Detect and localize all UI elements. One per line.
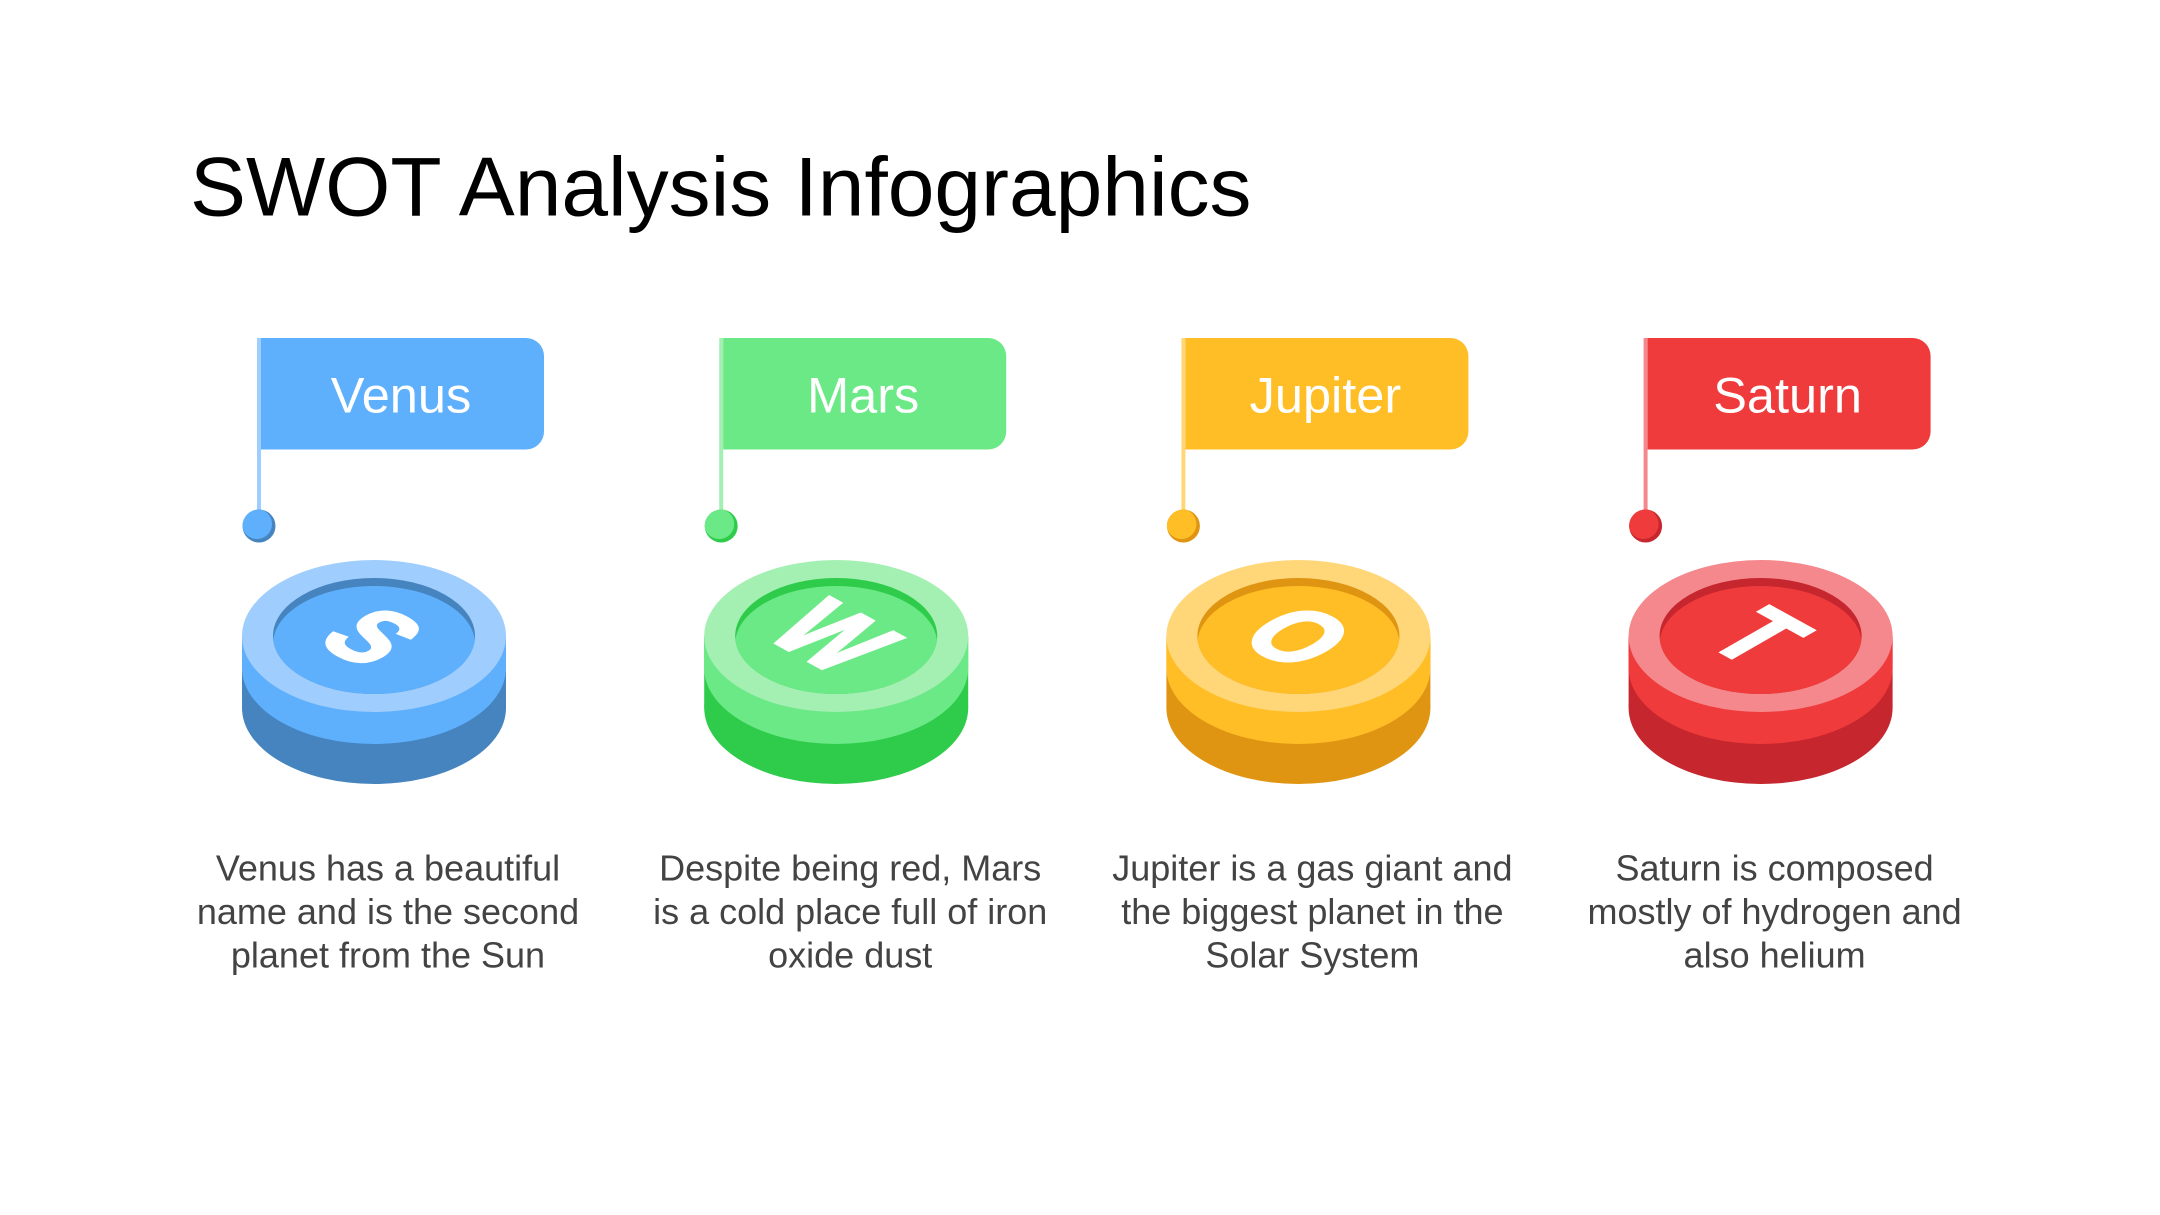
panel: Venus xyxy=(197,338,579,976)
text block: Venus: planet from the Sun xyxy=(231,934,545,976)
text block: Saturn: mostly of hydrogen and xyxy=(1587,891,1962,932)
flag: Saturn: Saturn xyxy=(1713,366,1862,424)
icon: disc O xyxy=(1166,560,1430,784)
flag: Venus: Venus xyxy=(331,366,471,424)
flag: Mars xyxy=(719,338,1006,510)
flag: Venus xyxy=(257,338,544,510)
flag: Mars: Mars xyxy=(807,366,919,424)
icon: pin dot xyxy=(1166,509,1200,542)
icon: pin dot xyxy=(704,509,738,542)
text block: Jupiter: the biggest planet in the xyxy=(1121,891,1504,932)
panel: Mars xyxy=(653,338,1047,976)
title: SWOT Analysis Infographics xyxy=(190,140,1252,234)
icon: disc W: W xyxy=(740,584,926,689)
text block: Saturn: also helium xyxy=(1684,934,1866,976)
icon: disc S: S xyxy=(294,592,451,681)
panel: Saturn xyxy=(1587,338,1962,976)
flag: Jupiter: Jupiter xyxy=(1250,366,1401,424)
flag: Jupiter xyxy=(1181,338,1468,510)
icon: disc T xyxy=(1629,560,1893,784)
text block: Jupiter: Jupiter is a gas giant and xyxy=(1112,848,1513,888)
text block: Saturn: Saturn is composed xyxy=(1616,848,1934,888)
text block: Mars: oxide dust xyxy=(768,934,932,976)
text block: Saturn xyxy=(1587,848,1962,976)
text block: Mars: Despite being red, Mars xyxy=(659,848,1041,888)
icon: disc S xyxy=(242,560,506,784)
icon: pin dot xyxy=(1629,509,1662,542)
flag: Saturn xyxy=(1644,338,1931,510)
icon: pin dot xyxy=(242,509,276,542)
text block: Venus: name and is the second xyxy=(197,891,579,932)
text block: Jupiter: Solar System xyxy=(1205,934,1419,976)
text block: Venus: Venus has a beautiful xyxy=(216,848,560,888)
text block: Mars xyxy=(653,848,1047,976)
text block: Venus xyxy=(197,848,579,976)
icon: disc T: T xyxy=(1683,594,1835,680)
text block: Jupiter xyxy=(1112,848,1513,976)
text block: Mars: is a cold place full of iron xyxy=(653,891,1047,932)
icon: disc O: O xyxy=(1215,590,1380,683)
panel: Jupiter xyxy=(1112,338,1513,976)
icon: disc W xyxy=(704,560,968,784)
